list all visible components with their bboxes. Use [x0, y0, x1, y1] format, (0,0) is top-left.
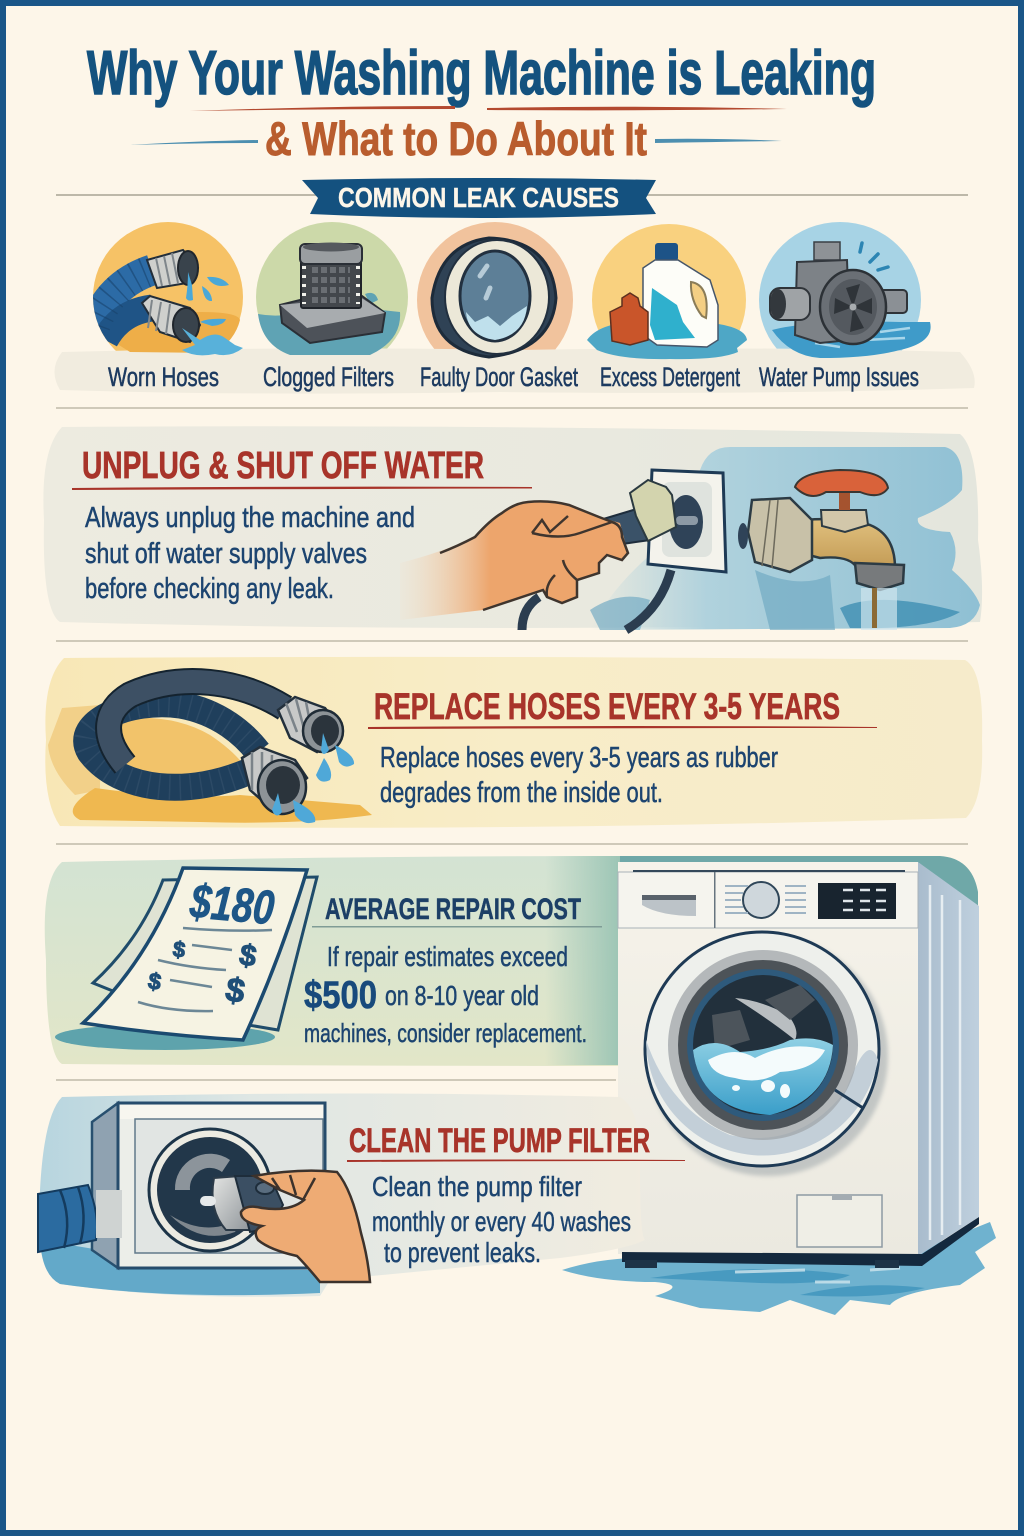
heading rule	[368, 726, 877, 729]
title underline	[190, 106, 787, 111]
heading rule	[347, 1160, 685, 1162]
icon: bill with $180: $	[146, 967, 163, 995]
body text	[380, 742, 778, 809]
body text: monthly or every 40 washes	[372, 1206, 631, 1237]
icon: water tap	[738, 470, 904, 630]
water background	[590, 447, 980, 630]
icon: wall socket	[648, 470, 726, 572]
service panel	[797, 1195, 882, 1247]
label: faulty door gasket: Faulty Door Gasket	[420, 362, 578, 392]
heading rule	[72, 487, 532, 490]
section ribbon: common leak causes	[56, 178, 968, 218]
icon: excess detergent	[587, 243, 747, 359]
icon: faulty door gasket	[432, 238, 556, 357]
body text: to prevent leaks.	[384, 1237, 541, 1268]
icon: plug	[600, 480, 676, 544]
subtitle: & What to Do About It	[265, 112, 647, 165]
body text: Always unplug the machine and	[85, 502, 415, 534]
body text	[85, 502, 415, 605]
label band	[54, 348, 975, 394]
body text: shut off water supply valves	[85, 538, 367, 570]
control panel	[618, 871, 918, 928]
icon: bill with $180	[55, 868, 317, 1050]
label: water pump issues: Water Pump Issues	[759, 362, 919, 392]
icon: power cord	[522, 570, 671, 630]
section ribbon: common leak causes: COMMON LEAK CAUSES	[338, 182, 619, 213]
subtitle rule right	[655, 139, 782, 143]
door	[645, 932, 888, 1176]
panel: clean the pump filter	[38, 1094, 685, 1297]
hand outline	[440, 501, 628, 610]
icon: water drops	[272, 733, 354, 823]
body text: Clean the pump filter	[372, 1171, 582, 1202]
yellow stain	[48, 705, 372, 823]
body text: before checking any leak.	[85, 573, 334, 605]
icon: bill with $180: $	[171, 936, 187, 963]
body text: Replace hoses every 3-5 years as rubber	[380, 742, 778, 774]
body text: on 8-10 year old	[385, 980, 539, 1011]
icon: small washer	[92, 1103, 325, 1268]
icon: bill with $180: $180	[187, 875, 277, 935]
panel: unplug and shut off water	[43, 426, 982, 630]
body text: If repair estimates exceed	[327, 941, 568, 972]
body text: machines, consider replacement.	[304, 1018, 587, 1048]
panel: replace hoses	[45, 657, 982, 828]
icon: bill with $180: $	[223, 970, 248, 1011]
icon: worn hoses	[95, 250, 243, 355]
label: clogged filters: Clogged Filters	[263, 362, 394, 392]
machine base	[622, 1217, 979, 1266]
water puddle	[562, 1222, 996, 1315]
icon: hand pulling plug	[400, 501, 628, 620]
panel: average repair cost	[45, 856, 978, 1066]
body text: $500	[304, 974, 377, 1017]
heading: UNPLUG & SHUT OFF WATER	[82, 445, 484, 487]
heading: REPLACE HOSES EVERY 3-5 YEARS	[374, 686, 840, 727]
heading rule	[312, 926, 602, 928]
title	[87, 39, 876, 165]
icon: washing machine	[562, 862, 996, 1315]
water	[40, 1240, 320, 1295]
label: excess detergent: Excess Detergent	[600, 362, 740, 392]
icon: water pump issues	[770, 242, 931, 358]
machine side	[918, 862, 979, 1256]
icon: bill with $180: $	[237, 938, 259, 974]
body text: degrades from the inside out.	[380, 777, 663, 809]
body text	[304, 941, 587, 1048]
icon: blue pipe	[38, 1185, 122, 1252]
label: worn hoses: Worn Hoses	[108, 362, 219, 392]
subtitle rule left	[130, 140, 258, 145]
machine front	[618, 862, 918, 1254]
panel: leak causes row	[54, 222, 975, 394]
teal backdrop	[620, 856, 978, 910]
icon: coiled hose	[87, 682, 343, 814]
icon: hand	[241, 1171, 370, 1282]
icon: filter cap	[200, 1176, 283, 1232]
heading: CLEAN THE PUMP FILTER	[349, 1122, 650, 1160]
body text	[372, 1171, 631, 1268]
icon: clogged filters	[258, 242, 400, 355]
heading: AVERAGE REPAIR COST	[325, 893, 581, 926]
icon backdrops	[93, 222, 921, 378]
